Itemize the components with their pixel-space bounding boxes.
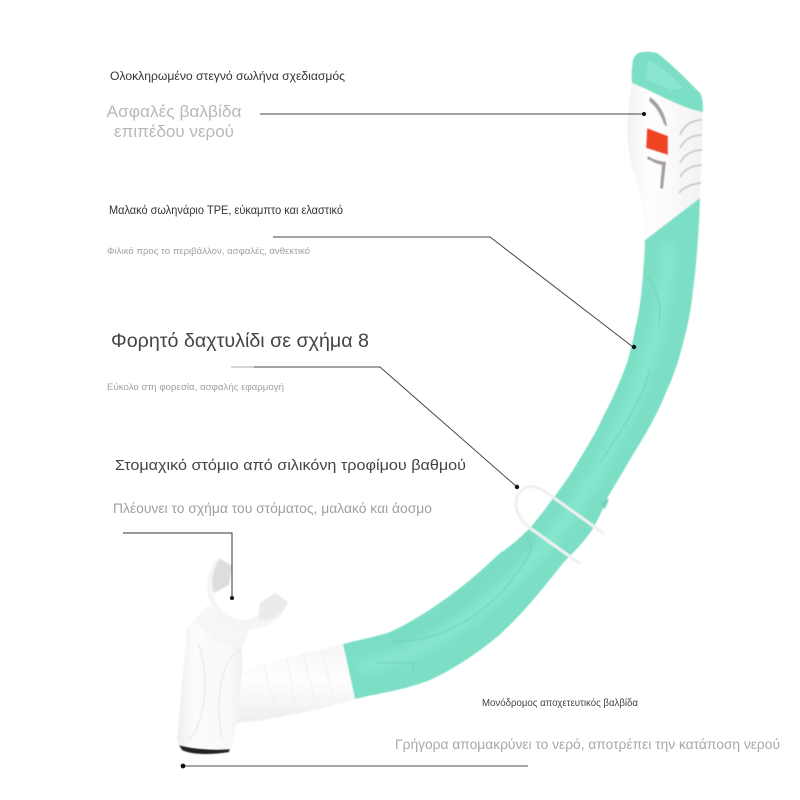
callout: purge valve bbox=[181, 697, 780, 768]
leader line: valve bbox=[260, 112, 646, 116]
leader line: ring bbox=[231, 367, 519, 489]
leader line: mouthpiece bbox=[123, 533, 234, 600]
callout: soft tube bbox=[107, 205, 636, 349]
description: removes water: Γρήγορα απομακρύνει το νερό, αποτρέπει την κατάποση νερού bbox=[395, 736, 780, 752]
figure-8 keeper ring bbox=[516, 486, 603, 563]
heading: one-way valve: Μονόδρομος αποχετευτικός βαλβίδα bbox=[482, 697, 638, 709]
description: mouth shape: Πλέουνει το σχήμα του στόματος, μαλακό και άοσμο bbox=[113, 500, 432, 516]
description: eco friendly: Φιλικό προς το περιβάλλον, ασφαλές, ανθεκτικό bbox=[107, 246, 310, 256]
leader line: valve base bbox=[181, 764, 528, 768]
side vents bbox=[679, 120, 702, 193]
heading: silicone mouthpiece: Στομαχικό στόμιο από σιλικόνη τροφίμου βαθμού bbox=[115, 458, 466, 474]
tube ribs bbox=[392, 535, 532, 640]
callout: mouthpiece bbox=[113, 458, 466, 600]
red valve indicator bbox=[646, 128, 668, 155]
description: easy wear: Εύκολο στη φορεσία, ασφαλής εφαρμογή bbox=[107, 382, 284, 392]
cap highlight bbox=[646, 60, 683, 90]
heading: dry snorkel: Ολοκληρωμένο στεγνό σωλήνα σχεδιασμός bbox=[110, 69, 345, 83]
leader line: tube bbox=[273, 237, 636, 349]
valve body contour bbox=[190, 645, 241, 739]
junction tube ridges bbox=[264, 649, 334, 719]
tube contour bbox=[375, 277, 660, 675]
black valve base bbox=[179, 745, 230, 754]
mouthpiece neck bbox=[188, 606, 250, 650]
white junction tube bbox=[235, 644, 355, 723]
tube highlight bbox=[360, 245, 668, 668]
mouthpiece crescent bbox=[207, 557, 288, 629]
callout: keeper ring bbox=[107, 331, 519, 489]
tube side notch bbox=[600, 499, 609, 509]
snorkel illustration bbox=[177, 52, 703, 754]
mouthpiece teeth grips bbox=[212, 559, 232, 593]
right teeth grip bbox=[258, 593, 288, 620]
heading: TPE tube: Μαλακό σωληνάριο TPE, εύκαμπτο και ελαστικό bbox=[109, 205, 343, 217]
white top housing bbox=[627, 82, 703, 240]
teal flexible tube bbox=[343, 197, 700, 699]
heading: figure-8 ring: Φορητό δαχτυλίδι σε σχήμα 8 bbox=[111, 331, 369, 352]
callout: dry top bbox=[106, 69, 646, 141]
subheading: second line: επιπέδου νερού bbox=[114, 122, 234, 141]
gray air slots bbox=[647, 97, 667, 189]
teal top cap bbox=[632, 52, 703, 112]
subheading: water level valve: Ασφαλές βαλβίδα bbox=[106, 102, 242, 121]
valve body bbox=[177, 623, 242, 751]
